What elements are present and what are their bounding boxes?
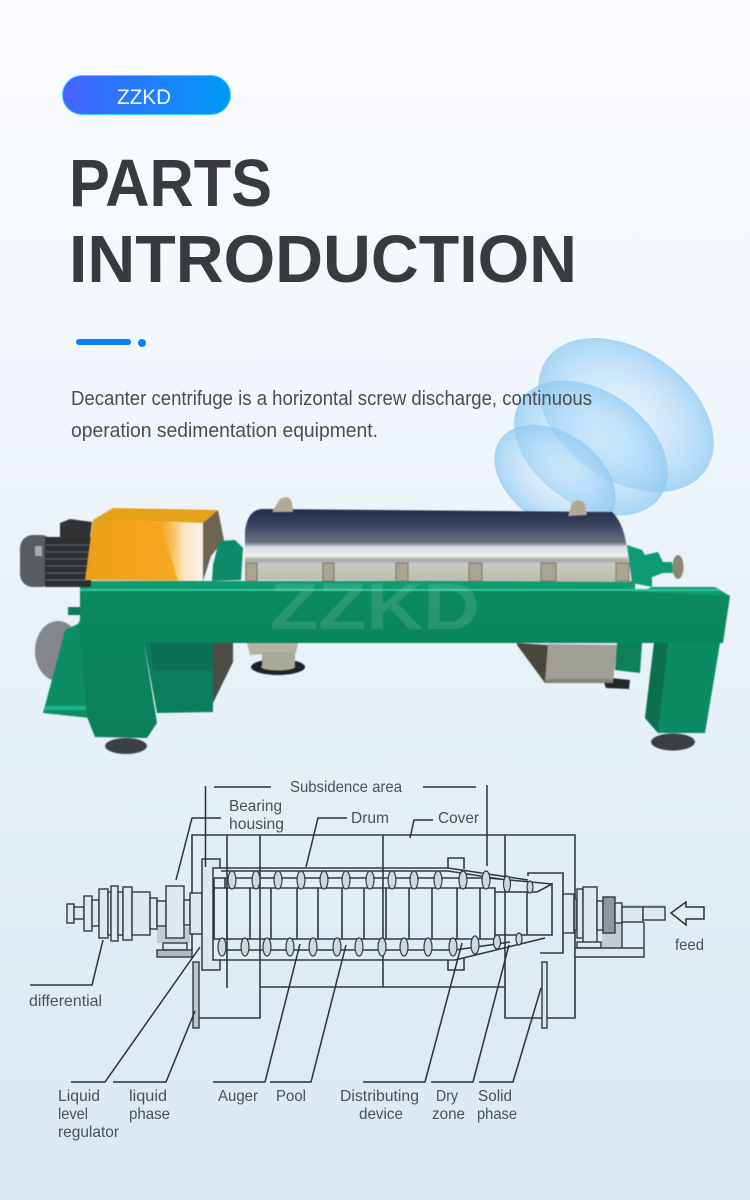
right shaft end: [627, 545, 684, 587]
diagram labels: zone: [432, 1106, 465, 1123]
diagram labels: differential: [29, 993, 102, 1010]
diagram labels: Liquid: [58, 1088, 100, 1105]
title: [69, 146, 577, 297]
diagram labels: level: [58, 1106, 88, 1123]
diagram labels: Distributing: [340, 1088, 419, 1105]
diagram labels: Cover: [438, 810, 480, 827]
motor: [20, 519, 92, 587]
right leg: [645, 643, 720, 733]
feed arrow: [671, 902, 704, 925]
diagram labels: Auger: [218, 1088, 259, 1105]
brand badge: ZZKD: [117, 86, 171, 109]
intro text: [71, 388, 592, 442]
bearing block: [212, 540, 243, 581]
brand badge: [62, 76, 230, 114]
left and right discharge plates: [193, 962, 547, 1028]
diagram labels: phase: [129, 1106, 170, 1123]
right discharge hopper: [517, 643, 642, 689]
machine photo illustration: [20, 497, 730, 754]
casing bumps: [448, 858, 464, 970]
diagram labels: phase: [477, 1106, 517, 1123]
left inner box: [144, 643, 233, 713]
diagram labels: regulator: [58, 1124, 120, 1141]
diagram labels: Drum: [351, 810, 389, 827]
leader lines: [30, 785, 541, 1082]
frame top plate: [80, 581, 730, 596]
lower screw flights: [218, 933, 522, 956]
lifting lugs: [272, 497, 587, 516]
outer casing: [192, 835, 575, 1018]
drum outline: [220, 868, 563, 960]
drum cover clips: [246, 563, 629, 581]
diagram labels: housing: [229, 816, 284, 833]
diagram labels: feed: [675, 937, 704, 954]
structure diagram: [29, 779, 704, 1141]
diagram labels: [29, 779, 704, 1141]
diagram labels: device: [359, 1106, 403, 1123]
intro text: operation sedimentation equipment.: [71, 420, 378, 442]
shading patches: [157, 905, 665, 948]
diagram labels: Pool: [276, 1088, 306, 1105]
watermark: ZZKD: [270, 569, 480, 643]
flange: [202, 859, 220, 970]
decorative blue ellipses: [474, 306, 743, 553]
gray fan housing: [35, 621, 81, 681]
title: INTRODUCTION: [69, 222, 577, 297]
frame beam and left leg: [80, 590, 730, 738]
diagram labels: Solid: [478, 1088, 512, 1105]
upper screw flights: [228, 871, 533, 893]
diagram labels: Bearing: [229, 798, 282, 815]
intro text: Decanter centrifuge is a horizontal screw discharge, continuous: [71, 388, 592, 410]
auger body: [214, 884, 552, 939]
title: PARTS: [69, 146, 272, 221]
diagram labels: Subsidence area: [290, 779, 402, 796]
feet: [105, 734, 695, 754]
green hopper: [43, 600, 90, 718]
middle outlet: [247, 643, 305, 675]
orange guard: [85, 508, 224, 581]
diagram labels: Dry: [436, 1088, 458, 1105]
diagram labels: liquid: [129, 1088, 167, 1105]
auger bands: [214, 878, 552, 950]
drum: [245, 509, 630, 582]
accent marker: [76, 339, 146, 347]
left shaft assembly: [67, 886, 202, 957]
right shaft assembly: [563, 887, 665, 957]
